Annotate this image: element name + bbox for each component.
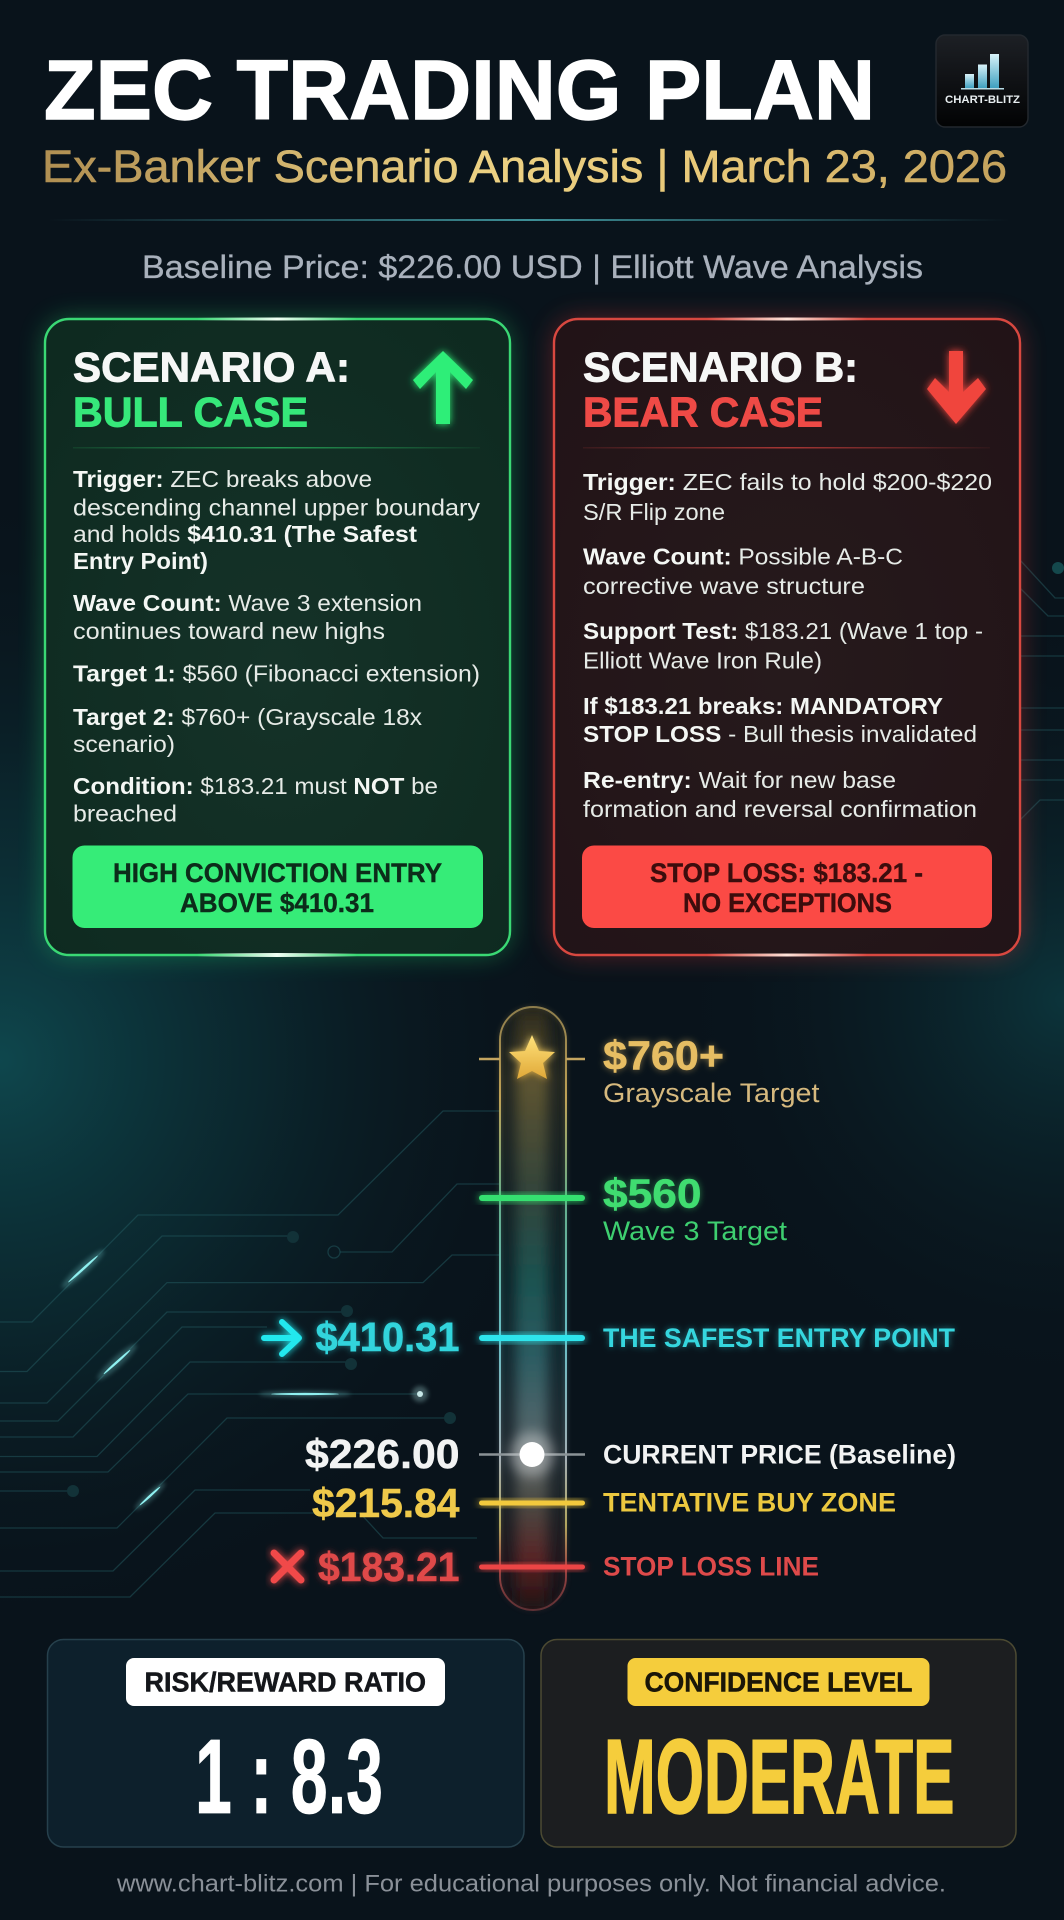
text: bear case details: formation and reversal confirmation [583,796,977,822]
level: $760+ [479,1032,820,1108]
text: bear case details: STOP LOSS - Bull thesis invalidated [583,721,977,747]
panel: confidence level [541,1640,1016,1847]
text: bear case details: S/R Flip zone [583,499,725,525]
text: bear case details: Trigger: ZEC fails to hold $200-$220 [583,469,992,495]
callout: high conviction entry: HIGH CONVICTION ENTRY [113,858,442,888]
heading: scenario A: SCENARIO A: [73,344,350,390]
level: $760+: $760+ [603,1032,724,1078]
text: bear case details: Support Test: $183.21 (Wave 1 top - [583,618,983,644]
logo: Chart-Blitz [936,35,1028,127]
divider [48,219,1010,221]
heading: scenario A: BULL CASE [73,388,308,436]
callout: high conviction entry [72,846,483,928]
text: bear case details: corrective wave structure [583,573,865,599]
subtitle: Ex-Banker Scenario Analysis | March 23, 2026 [42,141,1007,192]
text: bull case details: descending channel upper boundary [73,494,480,520]
text: bear case details: Re-entry: Wait for new base [583,767,896,793]
level: $410.31 entry: THE SAFEST ENTRY POINT [603,1323,955,1353]
logo: Chart-Blitz: CHART-BLITZ [945,94,1020,106]
footer: www.chart-blitz.com | For educational purposes only. Not financial advice. [116,1870,946,1898]
text: bear case details: If $183.21 breaks: MANDATORY [583,693,943,719]
text: bull case details [73,466,480,826]
icon: red cross [274,1553,301,1580]
icon: down arrow [927,351,986,424]
level: $183.21 stop loss: STOP LOSS LINE [603,1552,819,1582]
chart: price ladder [264,1007,956,1610]
level: $183.21 stop loss [274,1544,819,1590]
text: bull case details: Entry Point) [73,548,208,574]
level: $215.84 buy zone: $215.84 [312,1480,460,1526]
level: $226.00 current price [305,1431,956,1477]
text: bull case details: Wave Count: Wave 3 extension [73,590,422,616]
text: bull case details: continues toward new highs [73,618,385,644]
heading: scenario B: SCENARIO B: [583,344,858,390]
icon: right arrow [264,1322,299,1354]
label pill [628,1658,930,1706]
heading: scenario B: BEAR CASE [583,388,823,436]
ratio value: 1 : 8.3 [195,1718,383,1836]
callout: high conviction entry: ABOVE $410.31 [180,888,374,918]
level: $410.31 entry [264,1314,955,1360]
level: $560: Wave 3 Target [603,1216,788,1246]
baseline price line: Baseline Price: $226.00 USD | Elliott Wave Analysis [142,249,923,285]
heading: scenario B [583,344,858,436]
level: $226.00 current price: CURRENT PRICE (Baseline) [603,1440,956,1470]
thermometer tube [500,1007,566,1610]
text: bear case details: Wave Count: Possible A-B-C [583,544,903,570]
level: $560: $560 [603,1170,702,1216]
heading: scenario A [73,344,350,436]
panel: scenario B bear case [554,318,1020,956]
text: bull case details: and holds $410.31 (The Safest [73,521,417,547]
level: $215.84 buy zone [312,1480,896,1526]
label pill: RISK/REWARD RATIO [144,1666,426,1698]
text: bull case details: Condition: $183.21 must NOT be [73,773,438,799]
panel: risk/reward ratio [48,1640,524,1847]
label pill [126,1658,445,1706]
callout: stop loss: NO EXCEPTIONS [683,888,892,918]
level: $410.31 entry: $410.31 [316,1314,460,1360]
callout: stop loss: STOP LOSS: $183.21 - [650,858,923,888]
label pill: CONFIDENCE LEVEL [644,1666,912,1698]
icon: up arrow [413,351,473,424]
text: bull case details: scenario) [73,731,175,757]
level: $215.84 buy zone: TENTATIVE BUY ZONE [603,1488,896,1518]
level: $560 [479,1170,788,1246]
level: $760+: Grayscale Target [603,1078,820,1108]
level: $226.00 current price: $226.00 [305,1431,460,1477]
text: bear case details: Elliott Wave Iron Rule) [583,648,822,674]
text: bear case details [583,469,992,822]
text: bull case details: breached [73,800,177,826]
title: ZEC TRADING PLAN [44,43,875,137]
icon: star [509,1035,555,1079]
text: bull case details: Target 2: $760+ (Grayscale 18x [73,704,422,730]
callout: stop loss [582,846,992,928]
level: $183.21 stop loss: $183.21 [318,1544,460,1590]
text: bull case details: Target 1: $560 (Fibonacci extension) [73,660,480,686]
panel: scenario A bull case [45,318,510,957]
text: bull case details: Trigger: ZEC breaks above [73,466,372,492]
